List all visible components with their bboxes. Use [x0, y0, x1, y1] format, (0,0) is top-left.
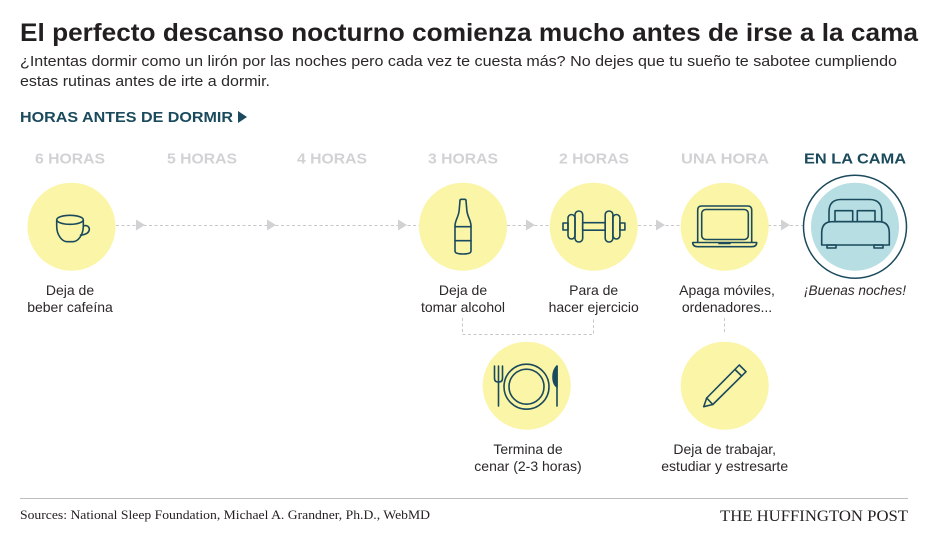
step: exercise: Para de	[569, 282, 618, 298]
hour labels: UNA HORA	[681, 150, 769, 168]
intro text: estas rutinas antes de irte a dormir.	[20, 73, 270, 90]
icon: laptop	[693, 206, 757, 247]
step: caffeine: Deja de	[46, 282, 94, 298]
step: dinner: cenar (2-3 horas)	[474, 458, 582, 474]
hour labels: 2 HORAS	[559, 150, 629, 168]
hour labels: 3 HORAS	[428, 150, 498, 168]
step: in bed	[804, 175, 906, 298]
icon: bottle	[455, 199, 471, 254]
footer rule	[20, 498, 908, 499]
hour labels: EN LA CAMA	[804, 150, 906, 168]
hour labels: 5 HORAS	[167, 150, 237, 168]
step: devices: ordenadores...	[682, 299, 772, 315]
title: El perfecto descanso nocturno comienza mucho antes de irse a la cama	[20, 19, 919, 47]
step: caffeine	[27, 183, 116, 315]
step: alcohol: Deja de	[439, 282, 487, 298]
hour labels: 4 HORAS	[297, 150, 367, 168]
intro text: ¿Intentas dormir como un lirón por las noches pero cada vez te cuesta más? No dejes que tu sueño te sabotee cumpliendo	[20, 53, 897, 70]
icon: dumbbell	[563, 211, 625, 242]
step: exercise	[549, 183, 639, 315]
axis heading: HORAS ANTES DE DORMIR	[20, 109, 233, 126]
icon: pencil	[704, 365, 746, 407]
step: work	[661, 342, 788, 474]
step: dinner	[474, 342, 582, 474]
hour labels: 6 HORAS	[35, 150, 105, 168]
step: alcohol: tomar alcohol	[421, 299, 505, 315]
step: caffeine: beber cafeína	[27, 299, 113, 315]
connector: work	[724, 318, 726, 334]
step: dinner: Termina de	[493, 441, 563, 457]
timeline connector	[116, 220, 804, 230]
intro text	[20, 53, 897, 90]
hour labels	[35, 150, 906, 168]
step: devices	[679, 183, 775, 315]
icon: coffee cup	[57, 215, 89, 242]
step: in bed: ¡Buenas noches!	[804, 282, 906, 298]
step: work: Deja de trabajar,	[673, 441, 776, 457]
connector: dinner bracket	[462, 318, 594, 334]
sources: Sources: National Sleep Foundation, Michael A. Grandner, Ph.D., WebMD	[20, 507, 430, 522]
step: alcohol	[419, 183, 507, 315]
logo: The Huffington Post: THE HUFFINGTON POST	[720, 508, 909, 525]
step: exercise: hacer ejercicio	[549, 299, 639, 315]
icon: bed	[822, 200, 889, 248]
icon: plate and cutlery	[494, 364, 557, 409]
step: work: estudiar y estresarte	[661, 458, 788, 474]
step: devices: Apaga móviles,	[679, 282, 775, 298]
